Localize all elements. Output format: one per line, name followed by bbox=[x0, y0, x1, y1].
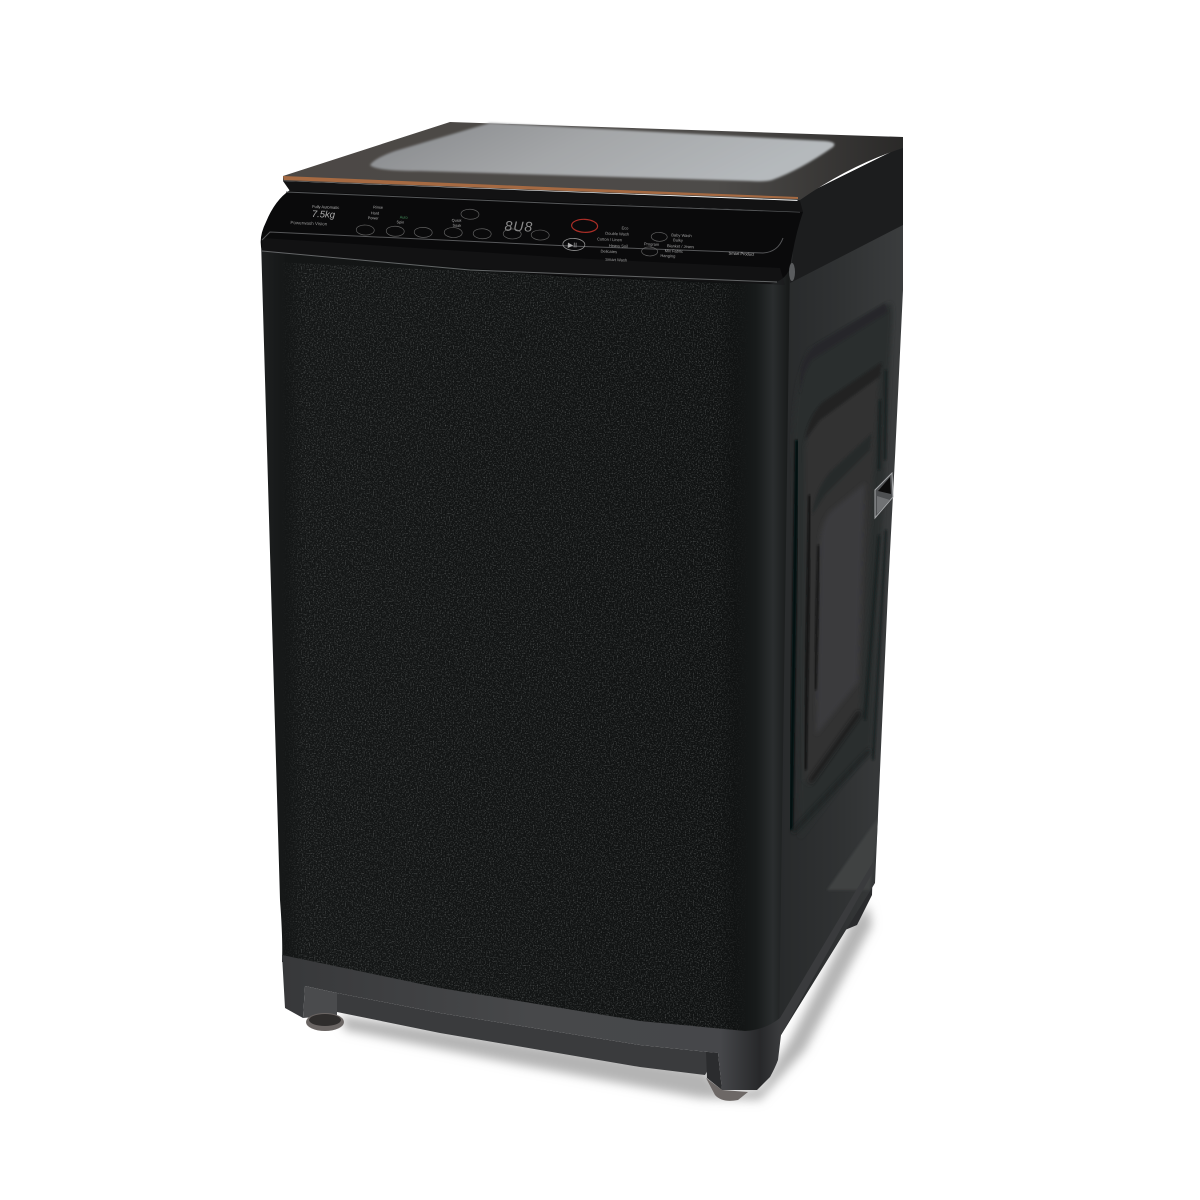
program buttons bbox=[356, 205, 550, 242]
control panel labels and icons bbox=[289, 202, 756, 268]
mode list: Smart Product bbox=[729, 251, 755, 257]
mode list: Hanging bbox=[660, 253, 675, 259]
right foot bbox=[706, 1078, 748, 1101]
program labels: Auto bbox=[400, 215, 408, 220]
program labels: Soak bbox=[452, 224, 461, 228]
right side panel bbox=[778, 146, 903, 1040]
mode list: Double Wash bbox=[605, 231, 629, 237]
program labels: Rinse bbox=[373, 205, 383, 210]
illustration: top-load washing machine bbox=[260, 122, 903, 1106]
program labels: Quick bbox=[452, 218, 462, 223]
start button: ▶II bbox=[568, 242, 577, 250]
glass lid bbox=[283, 122, 903, 212]
program labels: Hard bbox=[371, 211, 379, 216]
control panel fascia bbox=[261, 190, 803, 285]
capacity label: 7.5kg bbox=[312, 209, 336, 221]
mode list: Eco bbox=[621, 225, 629, 231]
capacity label bbox=[312, 204, 339, 221]
mode list: Bulky bbox=[673, 237, 683, 243]
floor shadow bbox=[340, 905, 872, 1100]
mode list: Baby Wash bbox=[671, 232, 692, 238]
mode list: Smart Wash bbox=[605, 257, 627, 263]
mode list: Mix Fabric bbox=[665, 248, 683, 254]
mode list: Heavy Soil bbox=[609, 243, 628, 249]
recessed underside bbox=[337, 993, 718, 1075]
digital display: 8U8 bbox=[504, 218, 534, 235]
brand label: Powerwash Vision bbox=[290, 220, 328, 227]
embossed outer panel bbox=[854, 304, 892, 756]
base plinth bbox=[282, 862, 873, 1090]
mode list: Program bbox=[644, 241, 660, 247]
left foot bbox=[306, 1013, 344, 1031]
program labels: Power bbox=[368, 216, 379, 221]
program labels bbox=[367, 205, 462, 228]
mode selector dials bbox=[641, 232, 667, 257]
embossed inner panel bbox=[818, 488, 864, 728]
mode list bbox=[596, 224, 756, 268]
vertical grooves bbox=[791, 440, 797, 830]
mode list: Cotton / Linen bbox=[597, 236, 622, 242]
embossed middle panel bbox=[808, 382, 876, 709]
front body bbox=[261, 240, 790, 1047]
mode list: Delicates bbox=[601, 249, 617, 254]
rear foot bbox=[840, 860, 873, 930]
program labels: Spin bbox=[397, 220, 404, 225]
start button bbox=[563, 238, 585, 251]
lid under-edge bbox=[283, 181, 803, 212]
icon: side handle bbox=[875, 473, 893, 518]
capacity label: Fully Automatic bbox=[312, 204, 339, 210]
lid window bbox=[370, 123, 834, 181]
power button bbox=[571, 219, 598, 233]
copper trim bbox=[283, 176, 798, 199]
diagonal creases bbox=[810, 712, 860, 782]
mode list: Blanket / Jeans bbox=[667, 243, 694, 249]
